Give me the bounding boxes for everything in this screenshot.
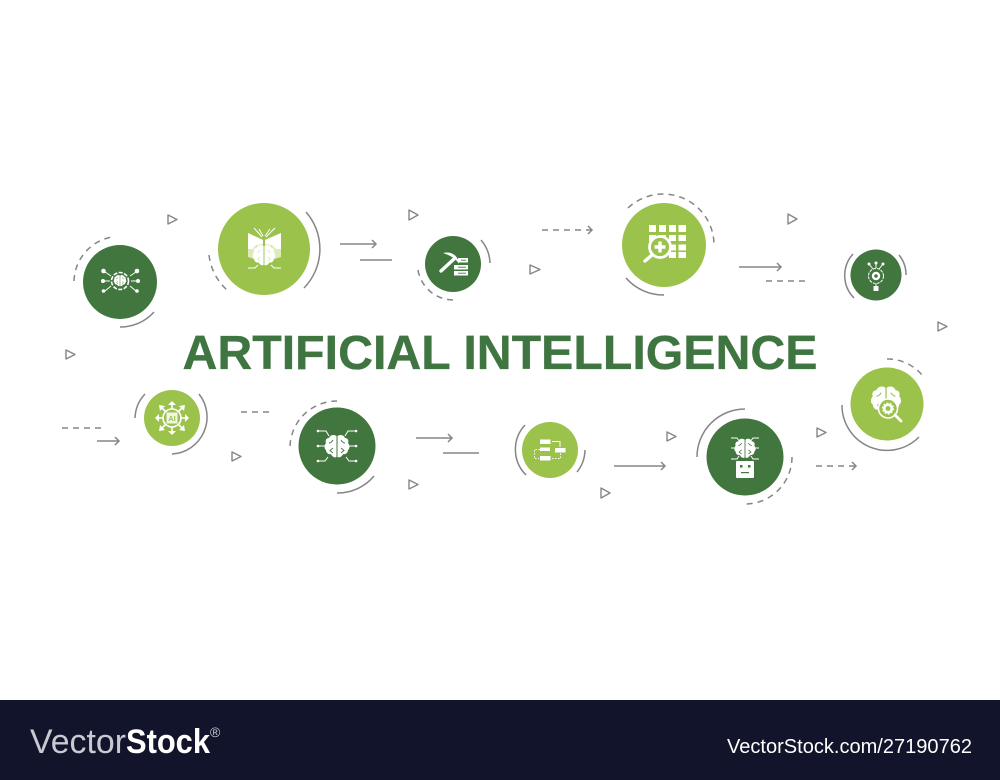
triangle markers: [66, 210, 947, 498]
icon: circuit brain: [317, 430, 357, 462]
icon: brain and gear magnifier: [871, 387, 901, 421]
icon: pickaxe and data: [441, 252, 468, 276]
icon: gear: [868, 262, 884, 291]
icon: AI chip: AI: [168, 414, 176, 423]
footer logo: Vector: [30, 723, 126, 761]
title: ARTIFICIAL INTELLIGENCE: [182, 326, 818, 380]
step 8: light circle with flowchart: [515, 422, 585, 478]
step 4: light circle with data grid and magnifier: [622, 194, 714, 295]
footer logo: Stock: [126, 723, 211, 761]
icon: robot brain: [731, 438, 759, 478]
icon: book and brain: [248, 228, 281, 268]
step 9: dark circle with brain and robot: [697, 409, 792, 504]
icon: flowchart: [534, 440, 566, 460]
footer bar: [0, 700, 1000, 780]
icon: networked brain: [101, 269, 140, 293]
arrows and dashes: [62, 226, 856, 470]
step 5: dark circle with gear and network: [845, 250, 906, 300]
footer logo: ®: [210, 724, 221, 740]
step 3: dark circle with pickaxe and servers: [418, 236, 490, 300]
step 10: light circle with brain and gear magnifier: [842, 359, 924, 450]
step 6: light circle with AI chip and arrows: [135, 390, 207, 454]
step 1: dark circle with networked brain: [74, 237, 157, 327]
step 7: dark circle with circuit brain: [290, 401, 376, 493]
footer image id: VectorStock.com/27190762: [727, 736, 972, 758]
icon: grid magnifier: [645, 225, 686, 261]
step 2: light circle with book and brain: [209, 203, 320, 295]
